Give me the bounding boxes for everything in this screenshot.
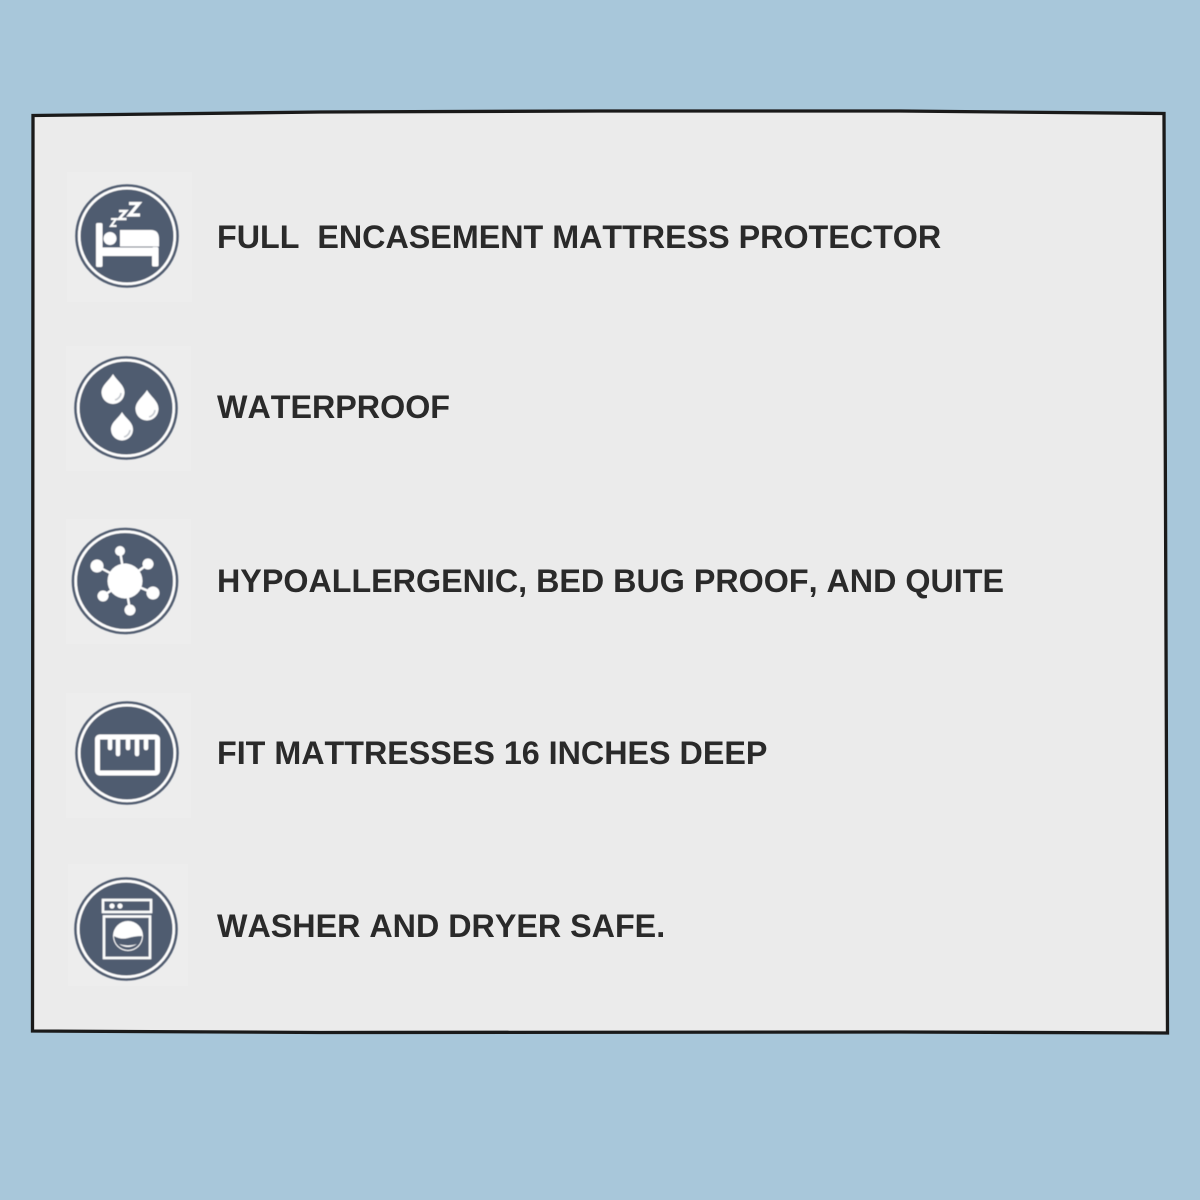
- text: fit depth: FIT MATTRESSES 16 INCHES DEEP: [217, 735, 767, 771]
- feature row: washer and dryer: [74, 876, 665, 982]
- text: waterproof: WATERPROOF: [217, 389, 450, 425]
- feature row: waterproof: [74, 356, 450, 460]
- feature row: full encasement: [74, 184, 941, 288]
- text: hypoallergenic: HYPOALLERGENIC, BED BUG PROOF, AND QUITE: [217, 563, 1004, 599]
- icon: washing machine: [74, 876, 178, 982]
- icon: allergen particle: [71, 527, 179, 635]
- text: washer and dryer: WASHER AND DRYER SAFE.: [217, 908, 665, 944]
- icon: ruler: [74, 700, 180, 806]
- text: full encasement: FULL ENCASEMENT MATTRESS PROTECTOR: [217, 219, 941, 255]
- feature row: hypoallergenic: [71, 527, 1004, 635]
- feature row: fit depth: [74, 700, 767, 806]
- icon: water drops: [74, 356, 178, 460]
- icon: sleeping person in bed: [74, 184, 180, 288]
